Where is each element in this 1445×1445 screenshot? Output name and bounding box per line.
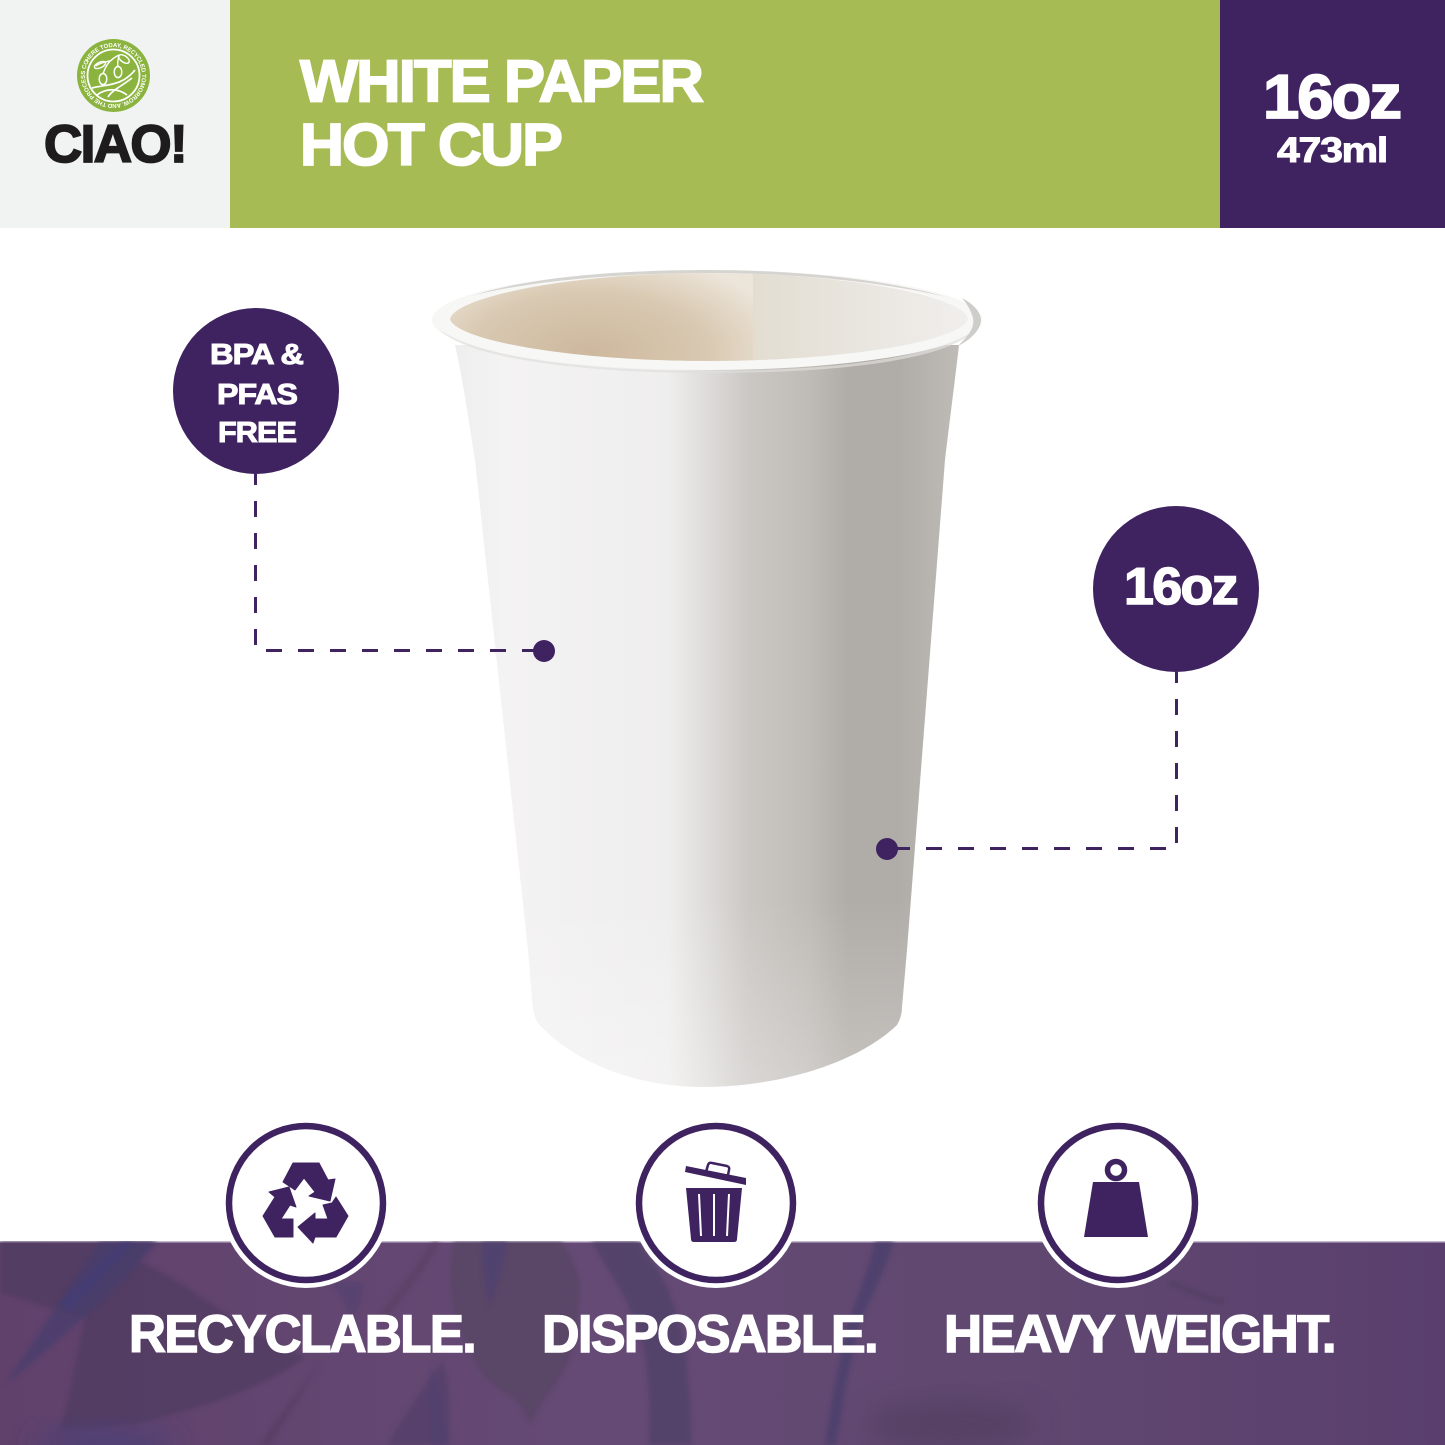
badge text: BPA & — [210, 339, 304, 371]
badge circle — [173, 308, 339, 474]
icon: trash can — [685, 1163, 746, 1242]
title line 1: WHITE PAPER — [300, 48, 703, 114]
title line 2: HOT CUP — [300, 111, 561, 178]
leader dot — [533, 640, 555, 662]
leader line — [256, 474, 538, 650]
cup rim — [432, 270, 982, 373]
feature: disposable — [542, 1118, 877, 1364]
badge text: FREE — [218, 417, 297, 449]
label: RECYCLABLE. — [129, 1305, 475, 1364]
label: DISPOSABLE. — [542, 1305, 877, 1364]
icon: weight — [1084, 1162, 1148, 1237]
logo wordmark: CIAO! — [44, 115, 186, 174]
callout: 16oz capacity — [876, 506, 1259, 860]
callout: BPA and PFAS free — [173, 308, 555, 662]
feature: recyclable — [129, 1118, 475, 1364]
icon: recycling arrows — [263, 1163, 348, 1243]
header: size panel — [1220, 0, 1445, 228]
label: HEAVY WEIGHT. — [944, 1305, 1335, 1364]
cup interior — [445, 270, 973, 365]
background leaves — [0, 1241, 1225, 1445]
icon circle — [631, 1118, 801, 1288]
size in millilitres: 473ml — [1277, 131, 1387, 170]
header: logo panel — [0, 0, 230, 228]
icon circle — [1033, 1118, 1203, 1288]
feature: heavy weight — [944, 1118, 1335, 1364]
leader dot — [876, 838, 898, 860]
icon: round green olive badge — [77, 39, 150, 112]
size in ounces: 16oz — [1263, 63, 1400, 132]
header: title panel — [230, 0, 1220, 228]
icon: round green olive badge: HERE TODAY, RECYCLED TOMORROW. AND THE PROCESS CONTINUES. — [80, 43, 146, 108]
badge text: 16oz — [1124, 558, 1238, 616]
leader line — [894, 672, 1176, 848]
badge text: PFAS — [217, 379, 298, 411]
icon circle — [221, 1118, 391, 1288]
badge circle — [1093, 506, 1259, 672]
paper cup illustration — [432, 270, 982, 1087]
cup body — [455, 345, 959, 1087]
badge text — [210, 339, 304, 449]
bottom band with leaf background — [0, 1241, 1445, 1445]
